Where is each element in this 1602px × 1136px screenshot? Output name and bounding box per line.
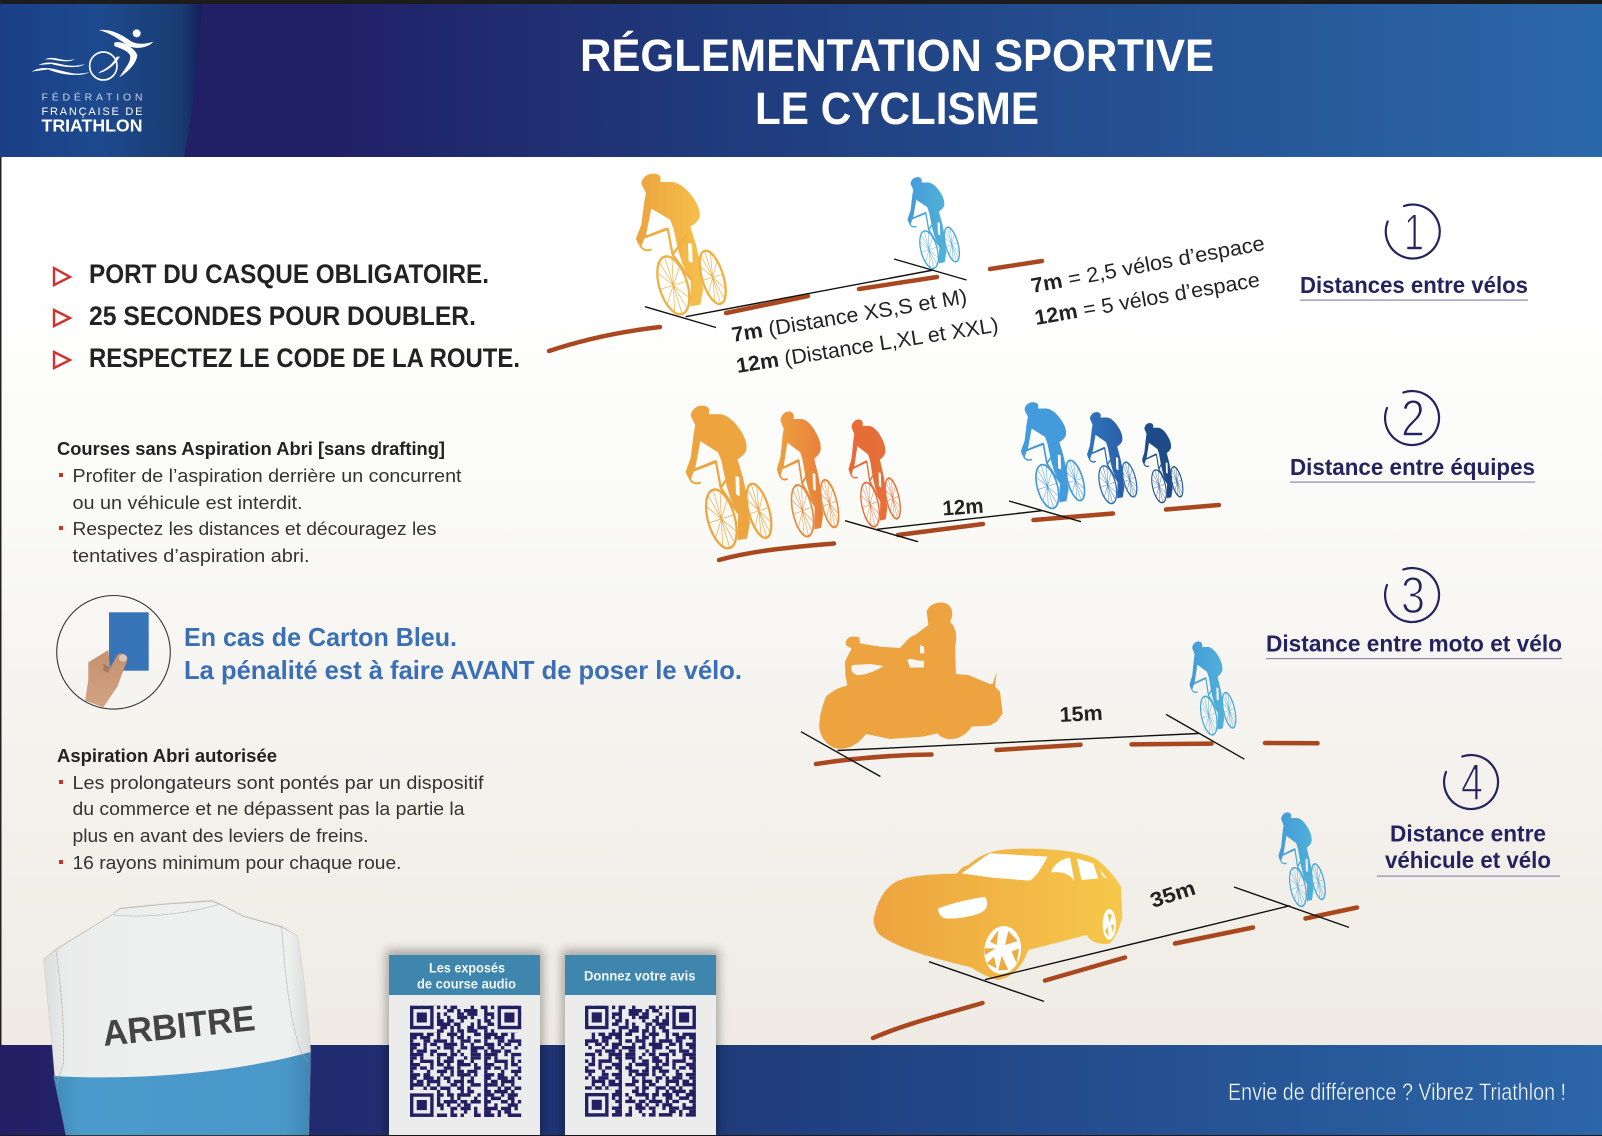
heading 3: distance entre moto et vélo <box>1266 567 1562 659</box>
distance labels: 12m = 5 vélos d’espace <box>1033 268 1262 330</box>
logo: Fédération Française de Triathlon <box>32 29 153 136</box>
diagram 1: distances entre vélos <box>549 174 1266 378</box>
callout: blue card penalty: La pénalité est à faire AVANT de poser le vélo. <box>184 655 742 685</box>
text block: aspiration abri autorisée <box>57 745 484 873</box>
cyclist: orange <box>636 174 731 318</box>
page background <box>0 150 1602 1050</box>
icon: triangle bullet 1 <box>54 268 70 285</box>
heading 2: distance entre équipes <box>1290 390 1535 483</box>
logo: Fédération Française de Triathlon: TRIATHLON <box>42 116 142 136</box>
vest label: ARBITRE <box>101 997 257 1054</box>
heading 2: distance entre équipes: Distance entre équipes <box>1290 454 1535 480</box>
text block: aspiration abri autorisée: du commerce et ne dépassent pas la partie la <box>72 798 465 819</box>
panel: QR code avis: Donnez votre avis <box>584 968 696 984</box>
distance labels: 12m (Distance L,XL et XXL) <box>735 314 1000 378</box>
title: RÉGLEMENTATION SPORTIVE <box>580 30 1214 81</box>
callout: blue card penalty <box>184 622 742 685</box>
text block: aspiration abri autorisée: 16 rayons minimum pour chaque roue. <box>72 852 402 873</box>
diagram 4: distance entre véhicule et vélo <box>873 812 1357 1038</box>
distance labels: 7m (Distance XS,S et M) <box>730 285 969 347</box>
heading 3: distance entre moto et vélo: Distance entre moto et vélo <box>1266 630 1562 656</box>
callout: blue card penalty: En cas de Carton Bleu. <box>184 622 457 652</box>
panel: QR code audio: de course audio <box>417 976 516 992</box>
text block: courses sans aspiration abri: Respectez les distances et découragez les <box>72 518 436 539</box>
title: LE CYCLISME <box>755 83 1039 134</box>
icon: hand holding blue card <box>57 596 170 709</box>
cyclist: blue <box>1278 812 1328 909</box>
panel: QR code audio: Les exposés <box>429 960 505 976</box>
key rules list: PORT DU CASQUE OBLIGATOIRE. <box>89 259 489 289</box>
diagram 2: distance entre équipes <box>686 402 1219 560</box>
heading 1: distances entre vélos <box>1300 204 1528 301</box>
heading 1: distances entre vélos: 1 <box>1404 204 1424 262</box>
key rules list: RESPECTEZ LE CODE DE LA ROUTE. <box>89 343 520 373</box>
heading 4: distance entre véhicule et vélo: véhicule et vélo <box>1385 847 1551 873</box>
distance labels: 7m = 2,5 vélos d’espace <box>1029 232 1266 298</box>
key rules list: 25 SECONDES POUR DOUBLER. <box>89 301 476 331</box>
QR code 1 <box>410 1006 521 1117</box>
text block: courses sans aspiration abri: Profiter de l’aspiration derrière un concurrent <box>72 465 462 486</box>
cyclist: team blue 1 <box>1021 402 1088 511</box>
cyclist: blue <box>908 177 962 271</box>
title <box>580 30 1214 134</box>
QR code 2 <box>585 1006 696 1117</box>
text block: courses sans aspiration abri: tentatives d’aspiration abri. <box>72 545 310 566</box>
heading 4: distance entre véhicule et vélo <box>1377 754 1560 877</box>
heading 1: distances entre vélos: Distances entre vélos <box>1300 272 1528 298</box>
text block: aspiration abri autorisée: Aspiration Abri autorisée <box>57 745 277 766</box>
text block: courses sans aspiration abri: Courses sans Aspiration Abri [sans drafting] <box>57 438 445 459</box>
key rules list <box>54 259 520 373</box>
logo: Fédération Française de Triathlon: FRANÇAISE DE <box>42 106 142 118</box>
icon: triangle bullet 2 <box>54 310 70 326</box>
text block: aspiration abri autorisée: plus en avant des leviers de freins. <box>72 825 368 846</box>
distance label 12m: 12m <box>942 495 984 520</box>
panel: QR code avis <box>562 950 719 1136</box>
text block: aspiration abri autorisée: Les prolongateurs sont pontés par un dispositif <box>72 772 484 793</box>
panel: QR code audio <box>386 950 543 1136</box>
cyclist: team orange 2 <box>777 412 842 540</box>
distance labels <box>730 232 1266 378</box>
cyclist: team blue 2 <box>1087 412 1140 506</box>
illustration: referee vest <box>44 901 311 1135</box>
heading 4: distance entre véhicule et vélo: Distance entre <box>1390 820 1546 846</box>
icon: car silhouette <box>874 849 1122 980</box>
distance label 35m: 35m <box>1147 877 1198 913</box>
diagram 3: distance entre moto et vélo <box>801 602 1318 776</box>
logo: Fédération Française de Triathlon: FÉDÉRATION <box>42 91 142 104</box>
header band <box>0 4 1602 157</box>
cyclist: team orange 3 <box>848 419 903 530</box>
cyclist: blue <box>1190 641 1239 737</box>
heading 2: distance entre équipes: 2 <box>1401 390 1425 448</box>
text block: courses sans aspiration abri: ou un véhicule est interdit. <box>72 492 302 513</box>
text block: courses sans aspiration abri <box>57 438 462 566</box>
heading 4: distance entre véhicule et vélo: 4 <box>1461 754 1483 812</box>
heading 3: distance entre moto et vélo: 3 <box>1401 567 1425 625</box>
cyclist: team orange 1 <box>686 406 776 552</box>
footer band <box>0 1045 1602 1136</box>
icon: motorbike silhouette <box>819 602 1003 749</box>
cyclist: team blue 3 <box>1142 423 1185 505</box>
icon: triangle bullet 3 <box>54 352 70 368</box>
distance label 15m: 15m <box>1059 702 1103 727</box>
